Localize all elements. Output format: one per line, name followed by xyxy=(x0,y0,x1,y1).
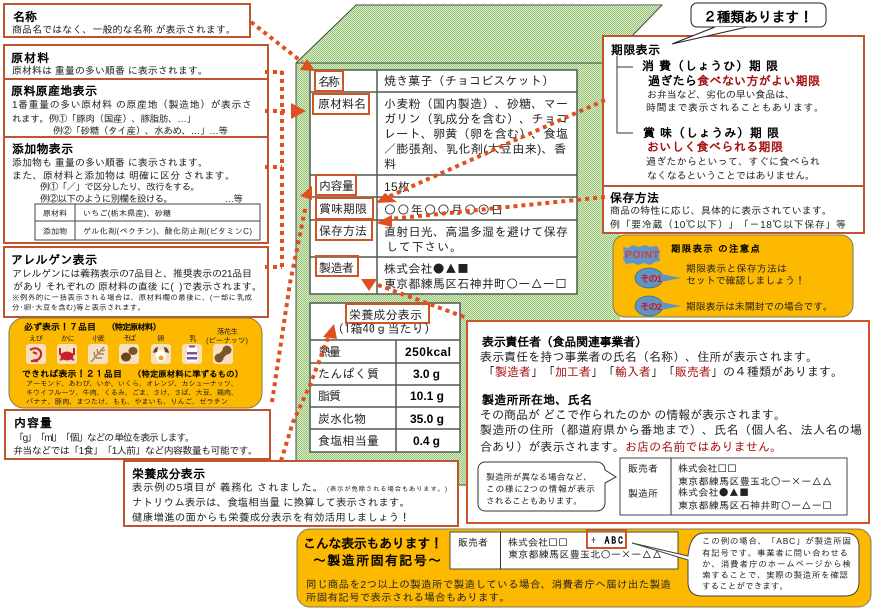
panel: 保存方法: 例「要冷蔵（10℃以下）」「－18℃以下保存」等 xyxy=(610,219,846,231)
package illustration xyxy=(296,5,662,485)
panel: allergen list: アーモンド、あわび、いか、いくら、オレンジ、カシューナッツ、 xyxy=(26,379,238,388)
panel: 表示責任者: 合あり）が表示されます。お店の名前ではありません。 xyxy=(480,440,782,454)
panel: 期限表示: 賞 味（しょうみ）期 限 xyxy=(643,126,779,140)
additive example table xyxy=(35,204,260,240)
panel: allergen list: 必ず表示！７品目 xyxy=(24,322,96,332)
food label table xyxy=(310,70,577,294)
nutrition heading box xyxy=(346,304,429,323)
label: 保存方法: 保存方法 xyxy=(319,224,367,238)
label values: レート、卵黄（卵を含む）、食塩 xyxy=(384,127,568,141)
nutrition table: 35.0 g xyxy=(410,412,444,426)
label values: ガリン（乳成分を含む）、チョコ xyxy=(384,112,568,126)
label values: ○○年○○月○○日 xyxy=(384,203,503,216)
seller and manufacturer table: 株式会社□□ xyxy=(678,464,737,474)
label values: して下さい。 xyxy=(386,240,462,254)
panel: 製造所固有記号: こんな表示もあります！ xyxy=(303,536,443,551)
additive example table: いちご(栃木県産)、砂糖 xyxy=(83,209,171,218)
panel: 添加物表示: …等 xyxy=(225,194,243,205)
panel: 添加物表示: また、原材料と添加物は 明確に区分 されます。 xyxy=(12,170,235,182)
label: 原材料名 xyxy=(313,94,369,114)
panel: 製造所固有記号: 所固有記号で表示される場合もあります。 xyxy=(306,592,510,604)
panel: allergen list: できれば表示！２１品目 xyxy=(22,368,122,379)
seller and manufacturer table xyxy=(620,458,847,515)
panel: allergen list: 落花生 xyxy=(217,327,238,336)
nutrition table: 熱量 xyxy=(319,345,341,359)
panel: 名称: 名称 xyxy=(13,10,37,24)
label values: 焼き菓子（チョコビスケット） xyxy=(384,74,554,88)
tree lines xyxy=(617,56,633,133)
panel: 表示責任者: 製造所の住所（都道府県から番地まで）、氏名（個人名、法人名の場 xyxy=(480,423,862,437)
nutrition table: 脂質 xyxy=(318,389,341,403)
panel: 添加物表示 xyxy=(4,137,268,243)
panel: アレルゲン表示: があり それぞれの 原材料の直後 に( )で表示されます。 xyxy=(13,281,262,293)
panel: allergen list: 卵 xyxy=(157,334,164,343)
label: 製造者: 製造者 xyxy=(319,261,354,275)
panel: 期限表示の注意点: 期限表示 の注意点 xyxy=(671,243,760,255)
nutrition table: たんぱく質 xyxy=(318,367,379,381)
label: 製造者 xyxy=(316,256,358,276)
label values: 料 xyxy=(384,157,396,171)
panel: 栄養成分表示: ナトリウム表示は、食塩相当量 に換算して表示されます。 xyxy=(132,497,410,509)
panel: 内容量 xyxy=(5,410,270,459)
callout: ABC explanation xyxy=(632,533,859,596)
seller example table: 株式会社□□ xyxy=(508,538,568,548)
panel: 表示責任者 xyxy=(467,321,869,523)
panel: 表示責任者: 表示責任を持つ事業者の氏名（名称）、住所が表示されます。 xyxy=(480,350,818,364)
panel: allergen list: 小麦 xyxy=(92,334,106,343)
callout: ABC explanation: 索することで、実際の製造所を確認 xyxy=(702,570,848,580)
panel: 保存方法: 保存方法 xyxy=(610,191,659,205)
label values: 小麦粉（国内製造）、砂糖、マー xyxy=(384,97,568,111)
label values: 東京都練馬区石神井町○ー△ー□ xyxy=(384,277,567,290)
panel: 原料原産地表示: れます。例①「豚肉（国産）、豚脂肪、…」 xyxy=(12,114,196,125)
panel: 原料原産地表示: 原料原産地表示 xyxy=(11,84,97,98)
arrow: 内容量 xyxy=(272,186,312,402)
label: 保存方法 xyxy=(316,220,372,240)
icon: crab xyxy=(57,344,77,364)
icon: buckwheat xyxy=(119,344,139,364)
nutrition table: （1箱40ｇ当たり） xyxy=(332,323,436,335)
callout: 2種類あります xyxy=(691,3,826,27)
panel: 添加物表示: 添加物も 重量の多い順番 に表示されます。 xyxy=(12,157,208,169)
panel: 名称 xyxy=(4,4,250,37)
panel: 期限表示: 過ぎたからといって、すぐに食べられ xyxy=(646,156,820,168)
ABC highlight: + ABC xyxy=(591,535,623,546)
panel: 原料原産地表示: 例②「砂糖（タイ産）、水あめ、…」…等 xyxy=(53,126,228,137)
seller and manufacturer table: 東京都練馬区石神井町○ー△ー□ xyxy=(678,500,832,511)
panel: 期限表示: お弁当など、劣化の早い食品は、 xyxy=(647,89,795,101)
nutrition table: 3.0 g xyxy=(413,367,440,381)
panel: allergen list: （特定原材料） xyxy=(107,322,161,332)
additive example table: ゲル化剤(ペクチン)、酸化防止剤(ビタミンC) xyxy=(83,227,252,236)
panel: 原材料 xyxy=(4,45,268,79)
panel: 期限表示: なくなるということではありません。 xyxy=(647,170,815,182)
label: 内容量 xyxy=(316,175,356,195)
panel: アレルゲン表示 xyxy=(4,247,268,317)
panel: allergen list: キウイフルーツ、牛肉、くるみ、ごま、さけ、さば、大豆、鶏肉、 xyxy=(26,388,238,397)
nutrition heading box: 栄養成分表示 xyxy=(349,308,422,322)
panel: 原材料: 原材料 xyxy=(11,51,49,65)
panel: アレルゲン表示: アレルゲン表示 xyxy=(11,253,97,267)
panel: 表示責任者: 「製造者」「加工者」「輸入者」「販売者」の４種類があります。 xyxy=(483,365,843,379)
arrow: 原材料 bracket xyxy=(265,71,306,267)
panel: allergen list: バナナ、豚肉、まつたけ、もも、やまいも、りんご、ゼラチン xyxy=(26,397,228,406)
icon: POINT badge: POINT xyxy=(625,249,660,261)
icon: shrimp xyxy=(26,344,46,364)
panel: 原材料: 原材料は 重量の多い順番 に表示されます。 xyxy=(12,65,208,77)
seller example table: 販売者 xyxy=(458,538,488,548)
panel: 添加物表示: 例①「／」で区分したり、改行をする。 xyxy=(40,182,200,193)
panel: 栄養成分表示: (表示が免除される場合もあります。) xyxy=(327,485,447,493)
seller example table xyxy=(450,530,678,569)
callout: 2種類あります: ２種類あります！ xyxy=(703,9,813,25)
label values: 直射日光、高温多湿を避けて保存 xyxy=(384,225,568,239)
panel: アレルゲン表示: 分･卵･大豆を含む)等と表示されます。 xyxy=(12,303,145,312)
panel: 表示責任者: その商品が どこで作られたのか の情報が表示されます。 xyxy=(480,408,786,422)
icon: milk xyxy=(182,344,202,364)
panel: 栄養成分表示: 表示例の5項目が 義務化 されました。 xyxy=(132,482,323,494)
panel: 保存方法 xyxy=(603,186,864,233)
label: 賞味期限 xyxy=(316,198,373,219)
callout: two manufacturers: 製造所が異なる場合など、 xyxy=(486,472,592,482)
icon: egg xyxy=(151,344,171,364)
nutrition table: 食塩相当量 xyxy=(318,434,379,448)
arrow: 栄養成分 xyxy=(281,324,337,461)
seller example table: 東京都練馬区豊玉北○ー×ー△△ xyxy=(508,549,662,560)
panel: 製造所固有記号 xyxy=(297,529,871,607)
label: 賞味期限: 賞味期限 xyxy=(319,202,367,216)
additive example table: 添加物 xyxy=(43,226,67,236)
panel: 期限表示: おいしく食べられる期限 xyxy=(647,140,783,154)
icon: peanut xyxy=(213,344,233,364)
panel: allergen list: （特定原材料に準ずるもの） xyxy=(133,369,243,379)
label values: ／膨張剤、乳化剤(大豆由来)、香 xyxy=(384,142,566,156)
callout: ABC explanation: 有記号です。事業者に問い合わせる xyxy=(702,548,848,558)
callout: two manufacturers: されることもあります。 xyxy=(486,496,582,506)
panel: 内容量: 弁当などでは「1食」「1人前」など内容数量も可能です。 xyxy=(13,445,258,457)
additive example table: 原材料 xyxy=(43,209,67,218)
icon: その2: その2 xyxy=(640,302,662,313)
callout: ABC explanation: か、消費者庁のホームページから検 xyxy=(702,559,851,569)
arrow: 期限表示 xyxy=(376,100,605,203)
panel: 内容量: 内容量 xyxy=(14,416,52,430)
label: 名称: 名称 xyxy=(318,75,340,89)
seller and manufacturer table: 株式会社●▲■ xyxy=(678,488,749,498)
callout: ABC explanation: することができます。 xyxy=(702,581,788,591)
panel: 栄養成分表示 xyxy=(124,461,458,526)
label values: 15枚 xyxy=(384,180,410,194)
label: 名称 xyxy=(315,71,343,91)
panel: 期限表示 xyxy=(603,27,864,186)
panel: 期限表示の注意点: 期限表示と保存方法は xyxy=(686,263,787,275)
seller and manufacturer table: 東京都練馬区豊玉北○ー×ー△△ xyxy=(678,476,832,487)
panel: allergen list: (ピーナッツ) xyxy=(206,336,248,345)
nutrition table: 10.1 g xyxy=(410,389,444,403)
icon: その1 xyxy=(635,268,681,288)
panel: アレルゲン表示: アレルゲンには義務表示の7品目と、推奨表示の21品目 xyxy=(12,268,252,280)
panel: allergen list: 乳 xyxy=(189,334,197,343)
arrow: 名称 xyxy=(251,22,315,71)
panel: 原料原産地表示: 1番重量の多い原材料 の原産地（製造地）が表示さ xyxy=(12,99,252,111)
panel: 表示責任者: 表示責任者（食品関連事業者） xyxy=(482,335,647,349)
icon: その1: その1 xyxy=(640,274,663,285)
panel: 製造所固有記号: 同じ商品を2つ以上の製造所で製造している場合、消費者庁へ届け出た製造 xyxy=(306,579,672,591)
panel: 名称: 商品名ではなく、一般的な名称 が表示されます。 xyxy=(12,24,236,36)
panel: 期限表示の注意点 xyxy=(613,235,853,317)
seller and manufacturer table: 販売者 xyxy=(628,464,658,474)
panel: 表示責任者: 製造所所在地、氏名 xyxy=(482,393,592,407)
panel: 原料原産地表示 xyxy=(4,79,268,137)
panel: allergen list: かに xyxy=(61,334,75,343)
panel: 期限表示: 期限表示 xyxy=(611,43,660,57)
callout: ABC explanation: この例の場合、「ABC」が製造所固 xyxy=(702,536,851,546)
panel: 栄養成分表示: 栄養成分表示 xyxy=(132,467,205,481)
label: 原材料名: 原材料名 xyxy=(318,97,366,111)
panel: 期限表示: 消 費（しょうひ）期 限 xyxy=(642,59,778,73)
panel: 内容量: 「g」「ml」「個」などの 単位を表示 します。 xyxy=(14,432,195,444)
panel: 期限表示の注意点: セットで確認しましょう！ xyxy=(686,275,805,287)
seller and manufacturer table: 製造所 xyxy=(628,488,658,499)
callout: two manufacturers xyxy=(478,462,616,511)
icon: POINT badge xyxy=(623,245,660,265)
panel: 添加物表示: 例②以下のように別欄を設ける。 xyxy=(40,194,173,205)
panel: allergen list xyxy=(9,318,262,408)
label values xyxy=(384,74,568,290)
panel: アレルゲン表示: ※例外的に一括表示される場合は、原材料欄の最後に、(一部に乳成 xyxy=(12,293,252,302)
callout: two manufacturers: この様に2つの情報が表示 xyxy=(486,484,595,494)
arrow: 保存方法 xyxy=(376,197,605,227)
panel: 期限表示: 時間まで表示されることもあります。 xyxy=(646,102,824,114)
panel: 添加物表示: 添加物表示 xyxy=(12,142,73,156)
label values: 株式会社●▲■ xyxy=(384,263,469,275)
arrow: 表示責任者 xyxy=(361,279,467,318)
icon: その2 xyxy=(635,296,681,316)
panel: allergen list: そば xyxy=(123,334,136,343)
panel: 期限表示: 過ぎたら食べない方がよい期限 xyxy=(648,74,820,88)
panel: 保存方法: 商品の特性に応じ、具体的に表示されています。 xyxy=(610,205,832,217)
panel: allergen list: えび xyxy=(29,334,44,343)
label: 内容量: 内容量 xyxy=(319,179,354,193)
nutrition table xyxy=(310,303,460,452)
nutrition table: 炭水化物 xyxy=(318,412,366,426)
ABC highlight xyxy=(587,530,626,548)
panel: 栄養成分表示: 健康増進の面からも栄養成分表示を有効活用しましょう！ xyxy=(132,512,410,524)
panel: 製造所固有記号: ～製造所固有記号～ xyxy=(313,553,441,568)
icon: wheat xyxy=(88,344,108,364)
panel: 期限表示の注意点: 期限表示は未開封での場合です。 xyxy=(686,301,833,313)
nutrition table: 250kcal xyxy=(405,345,451,359)
nutrition table: 0.4 g xyxy=(413,434,440,448)
